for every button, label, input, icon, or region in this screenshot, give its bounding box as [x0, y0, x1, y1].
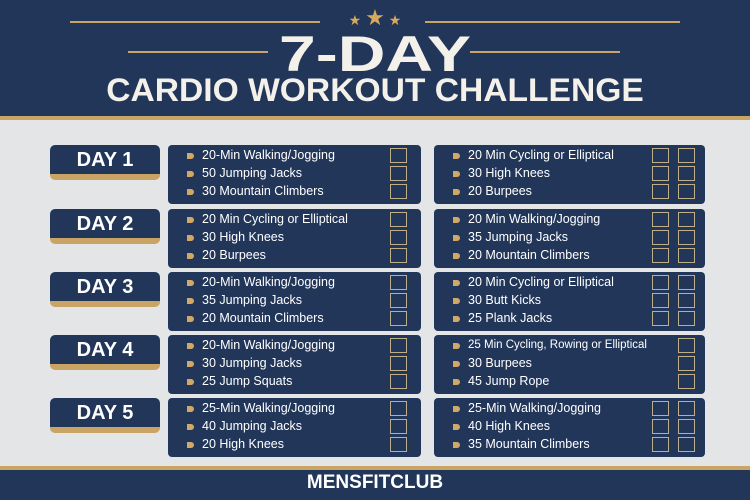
- panel: day1 left: 30 Mountain Climbers: [202, 184, 324, 198]
- subtitle: CARDIO WORKOUT CHALLENGE: [106, 72, 644, 108]
- panel: day4 right: 25 Min Cycling, Rowing or Elliptical: [468, 339, 647, 351]
- panel: day5 left: 20 High Knees: [202, 437, 284, 451]
- panel: day4 left: 30 Jumping Jacks: [202, 356, 302, 370]
- panel: day4 right: 45 Jump Rope: [468, 374, 549, 388]
- panel: day4 left: 20-Min Walking/Jogging: [202, 338, 335, 352]
- panel: day1 right: 20 Burpees: [468, 184, 532, 198]
- panel: day3 left: 20-Min Walking/Jogging: [202, 275, 335, 289]
- panel: day2 left: 20 Min Cycling or Elliptical: [202, 212, 348, 226]
- header band: [0, 0, 750, 116]
- panel: day4 left: [168, 335, 421, 394]
- panel: day5 left: [168, 398, 421, 457]
- panel: day2 left: [168, 209, 421, 268]
- footer brand: MENSFITCLUB: [307, 472, 443, 493]
- panel: day3 left: 35 Jumping Jacks: [202, 293, 302, 307]
- panel: day2 right: [434, 209, 705, 268]
- panel: day2 left: 20 Burpees: [202, 248, 266, 262]
- panel: day1 right: 20 Min Cycling or Elliptical: [468, 148, 614, 162]
- title: 7-DAY: 7-DAY: [279, 26, 471, 82]
- panel: day3 right: 25 Plank Jacks: [468, 311, 552, 325]
- panel: day2 right: 35 Jumping Jacks: [468, 230, 568, 244]
- panel: day4 right: [434, 335, 705, 394]
- panel: day5 right: [434, 398, 705, 457]
- panel: day1 left: [168, 145, 421, 204]
- panel: day5 right: 35 Mountain Climbers: [468, 437, 590, 451]
- panel: day3 right: 20 Min Cycling or Elliptical: [468, 275, 614, 289]
- panel: day5 right: 25-Min Walking/Jogging: [468, 401, 601, 415]
- panel: day3 right: [434, 272, 705, 331]
- panel: day2 right: 20 Mountain Climbers: [468, 248, 590, 262]
- panel: day3 right: 30 Butt Kicks: [468, 293, 541, 307]
- panel: day4 left: 25 Jump Squats: [202, 374, 292, 388]
- day labels: DAY 3: [77, 276, 133, 298]
- day labels: [50, 145, 160, 433]
- decorative stars: ★ ★ ★: [349, 5, 401, 30]
- day labels: DAY 4: [77, 339, 133, 361]
- footer brand: [0, 470, 750, 500]
- day labels: DAY 1: [77, 149, 133, 171]
- panel: day1 right: 30 High Knees: [468, 166, 550, 180]
- day labels: DAY 5: [77, 402, 133, 424]
- panel: day1 left: 20-Min Walking/Jogging: [202, 148, 335, 162]
- panel: day3 left: 20 Mountain Climbers: [202, 311, 324, 325]
- panel: day2 left: 30 High Knees: [202, 230, 284, 244]
- panel: day1 right: [434, 145, 705, 204]
- panel: day3 left: [168, 272, 421, 331]
- panel: day5 left: 40 Jumping Jacks: [202, 419, 302, 433]
- panel: day1 left: 50 Jumping Jacks: [202, 166, 302, 180]
- panel: day4 right: 30 Burpees: [468, 356, 532, 370]
- day labels: DAY 2: [77, 213, 133, 235]
- panel: day5 left: 25-Min Walking/Jogging: [202, 401, 335, 415]
- panel: day2 right: 20 Min Walking/Jogging: [468, 212, 600, 226]
- panel: day5 right: 40 High Knees: [468, 419, 550, 433]
